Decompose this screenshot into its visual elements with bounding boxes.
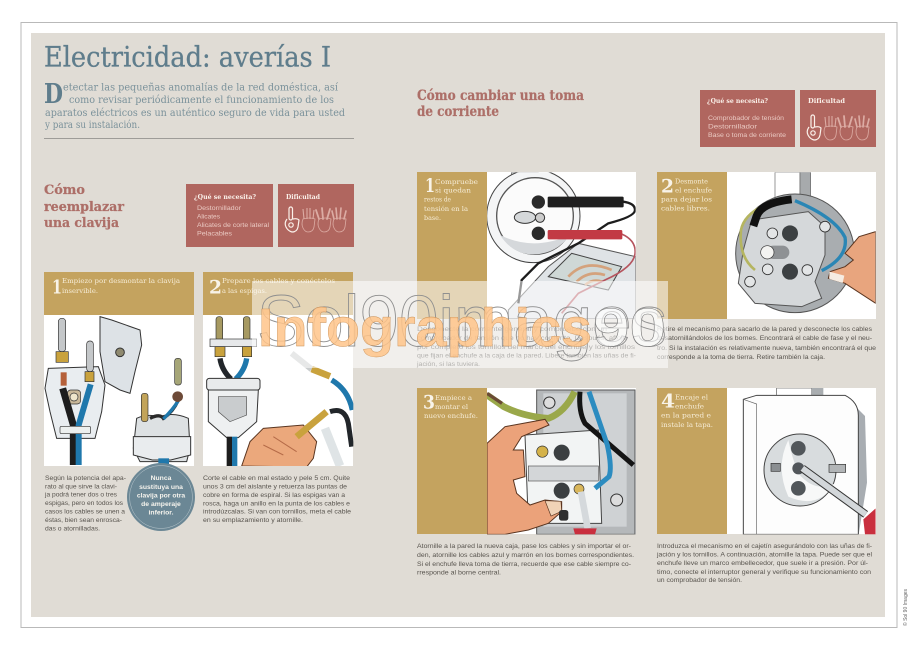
step 3 toma: gold panel: 3 bbox=[423, 392, 435, 414]
step 2 toma: text bbox=[657, 326, 876, 361]
intro paragraph: y para su instalación. bbox=[44, 119, 140, 131]
step 1 toma: gold panel: tensión en la bbox=[424, 205, 468, 213]
intro paragraph: como revisar periódicamente el funcionamiento de los bbox=[69, 94, 334, 106]
callout: nunca sustituya: Nunca bbox=[151, 475, 172, 482]
illustration: enchufe desmontado bbox=[727, 172, 876, 319]
heading: cómo reemplazar una clavija bbox=[44, 183, 124, 231]
step 1 clavija: text: éstas, bien sean enrosca- bbox=[45, 517, 122, 524]
step 2 toma: gold panel: el enchufe bbox=[675, 186, 712, 194]
step 4 toma: text bbox=[656, 543, 872, 584]
step 1 toma: text: por completo los tornillos del marco del enchufe y los tornillos bbox=[417, 344, 635, 351]
step 2 clavija: text: Corte el cable en mal estado y pele 5 cm. Quite bbox=[203, 475, 350, 482]
step 1 clavija: text: casos los cables se unen a bbox=[45, 509, 125, 516]
heading: cómo cambiar una toma de corriente bbox=[417, 88, 584, 120]
heading: cómo reemplazar una clavija: una clavija bbox=[44, 216, 120, 231]
step 1 toma: text: comprobador de tensión que no hay corriente. Después, afloje bbox=[417, 335, 628, 342]
watermark: Infographics bbox=[258, 298, 592, 358]
step 1 toma: text bbox=[416, 326, 636, 368]
intro paragraph: aparatos eléctricos es un auténtico seguro de vida para usted bbox=[45, 107, 345, 119]
panel: qué se necesita (clavija): ¿Qué se necesita? bbox=[194, 194, 256, 201]
panel: qué se necesita (clavija): Alicates bbox=[197, 214, 221, 220]
intro paragraph: etectar las pequeñas anomalías de la red doméstica, así bbox=[63, 82, 339, 94]
step 4 toma: text: timo, conecte el interruptor general y verifique su funcionamiento con bbox=[657, 569, 871, 576]
step 1 toma: gold panel: base. bbox=[424, 214, 441, 222]
step 3 toma: text: Atornille a la pared la nueva caja, pase los cables y sin importar el or- bbox=[417, 543, 631, 550]
panel: qué se necesita (toma): Comprobador de tensión bbox=[708, 115, 784, 122]
step 1 clavija: text: rato al que sirve la clavi- bbox=[45, 484, 117, 490]
step 1 clavija: text bbox=[44, 475, 126, 532]
step 3 toma: gold panel: nuevo enchufe. bbox=[424, 412, 478, 420]
step 2 clavija: header: Prepare los cables y conéctelos bbox=[222, 277, 335, 285]
step 1 toma: text: jación, si las tuviera. bbox=[416, 361, 480, 368]
step 1 clavija: header: Empiezo por desmontar la clavija bbox=[62, 277, 180, 285]
credit: © Sol 90 Images bbox=[902, 589, 909, 626]
step 3 toma: text: Si el enchufe lleva toma de tierra, recuerde que ese cable siempre co- bbox=[417, 561, 631, 568]
step 1 toma: text: Desconecte la corriente general y compruebe con un bbox=[417, 326, 608, 333]
callout: nunca sustituya: clavija por otra bbox=[137, 492, 185, 500]
step 4 toma: gold panel: Encaje el bbox=[675, 394, 708, 402]
step 2 clavija: text: rosca, haga un anillo en la punta de los cables e bbox=[203, 500, 350, 507]
step 4 toma: text: un comprobador de tensión. bbox=[657, 577, 742, 584]
step 1 clavija: header bbox=[44, 272, 194, 315]
callout: nunca sustituya: sustituya una bbox=[139, 484, 183, 491]
step 2 clavija: text: cobre en forma de espiral. Si las espigas van a bbox=[203, 492, 345, 499]
step 2 toma: gold panel: para dejar los bbox=[661, 196, 712, 204]
intro paragraph bbox=[44, 79, 345, 131]
step 1 toma: gold panel: 1 bbox=[425, 175, 435, 197]
step 2 toma: gold panel bbox=[657, 172, 727, 319]
step 2 toma: gold panel: Desmonte bbox=[675, 178, 708, 186]
step 3 toma: text: den, atornille los cables azul y marrón en los bornes correspondientes. bbox=[417, 552, 634, 559]
step 1 clavija: header: inservible. bbox=[62, 287, 98, 295]
step 2 clavija: header: 2 bbox=[209, 276, 222, 298]
step 1 toma: gold panel bbox=[417, 172, 487, 319]
heading: cómo cambiar una toma de corriente: de corriente bbox=[417, 104, 499, 120]
panel: qué se necesita (toma): Destornillador bbox=[708, 124, 758, 130]
panel: qué se necesita (clavija): Destornillador bbox=[197, 205, 242, 212]
illustration: clavija desmontada bbox=[44, 315, 194, 467]
illustration: comprobador de tensión bbox=[487, 169, 636, 319]
callout: nunca sustituya: de amperaje bbox=[141, 501, 181, 508]
step 1 toma: text: que fijan el enchufe a la caja de la pared. Libere también las uñas de fi- bbox=[417, 352, 636, 360]
step 3 toma: gold panel: Empiece a bbox=[435, 394, 472, 402]
step 2 clavija: header bbox=[203, 272, 353, 315]
step 2 toma: text: corresponde a la toma de tierra. Retire también la caja. bbox=[657, 354, 825, 361]
panel: qué se necesita (toma): Base o toma de corriente bbox=[708, 132, 786, 139]
step 1 clavija: text: ja podrá tener dos o tres bbox=[44, 492, 117, 499]
heading: cómo reemplazar una clavija: reemplazar bbox=[44, 200, 124, 215]
callout: nunca sustituya: inferior. bbox=[149, 510, 174, 516]
step 1 toma: gold panel: si quedan bbox=[435, 186, 471, 194]
step 1 toma: gold panel: restos de bbox=[424, 196, 451, 204]
step 2 clavija: text: unos 3 cm del aislante y retuerza las puntas de bbox=[203, 484, 347, 490]
step 3 toma: gold panel bbox=[417, 388, 487, 534]
step 4 toma: text: enchufe lleve un marco embellecedor, que suele ir a presión. Por úl- bbox=[657, 560, 868, 567]
callout: nunca sustituya bbox=[127, 463, 195, 531]
step 4 toma: gold panel: instale la tapa. bbox=[661, 421, 713, 429]
heading: cómo reemplazar una clavija: Cómo bbox=[44, 183, 85, 198]
step 2 toma: text: desatornillándolos de los bornes. Encontrará el cable de fase y el neu- bbox=[657, 335, 872, 342]
panel: qué se necesita (clavija) bbox=[186, 184, 273, 247]
panel: qué se necesita (toma) bbox=[700, 90, 795, 147]
step 4 toma: gold panel: en la pared e bbox=[661, 412, 711, 420]
panel: dificultad (toma) bbox=[800, 90, 876, 147]
title: Electricidad: averías I bbox=[44, 40, 331, 74]
step 1 clavija: text: espigas, pero en todos los bbox=[45, 500, 123, 507]
step 3 toma: text bbox=[417, 543, 634, 576]
step 1 clavija: text: das o atornilladas. bbox=[45, 526, 100, 532]
panel: dificultad (clavija) bbox=[278, 184, 354, 247]
heading: cómo cambiar una toma de corriente: Cómo cambiar una toma bbox=[417, 88, 584, 104]
panel: dificultad (toma): Dificultad bbox=[808, 98, 846, 105]
step 1 clavija: text: Según la potencia del apa- bbox=[45, 475, 126, 482]
step 2 toma: text: tro. Si la instalación es relativamente nueva, también encontrará el que bbox=[657, 345, 876, 352]
step 1 toma: gold panel: Compruebe bbox=[435, 178, 478, 186]
watermark: Sol90images bbox=[257, 282, 667, 362]
step 3 toma: text: rresponde al borne central. bbox=[417, 570, 501, 576]
step 2 clavija: text: introdúzcalas. Si van con tornillos, meta el cable bbox=[203, 509, 351, 516]
step 4 toma: gold panel: enchufe bbox=[675, 402, 704, 410]
step 4 toma: gold panel: 4 bbox=[661, 390, 675, 412]
step 2 toma: gold panel: 2 bbox=[661, 176, 674, 198]
illustration: montaje del nuevo enchufe bbox=[487, 388, 636, 534]
panel: qué se necesita (clavija): Alicates de corte lateral bbox=[197, 222, 270, 229]
panel: qué se necesita (toma): ¿Qué se necesita? bbox=[707, 98, 768, 105]
step 3 toma: gold panel: montar el bbox=[435, 403, 468, 411]
illustration: preparar cables bbox=[203, 315, 353, 467]
step 2 clavija: header: a las espigas. bbox=[222, 287, 267, 295]
panel: qué se necesita (clavija): Pelacables bbox=[197, 230, 233, 238]
step 4 toma: text: Introduzca el mecanismo en el cajetín asegurándolo con las uñas de fi- bbox=[657, 543, 872, 550]
step 2 clavija: text bbox=[203, 475, 351, 524]
panel: dificultad (clavija): Dificultad bbox=[286, 194, 321, 201]
step 2 toma: text: Retire el mecanismo para sacarlo de la pared y desconecte los cables bbox=[657, 326, 872, 333]
step 2 clavija: text: en su emplazamiento y atornille. bbox=[203, 517, 303, 524]
watermark: 90 bbox=[593, 298, 666, 358]
illustration: enchufe instalado bbox=[727, 388, 876, 534]
intro paragraph: D bbox=[44, 79, 63, 110]
step 4 toma: gold panel bbox=[657, 388, 727, 534]
step 4 toma: text: jación y los tornillos. A continuación, atornille la tapa. Puede ser que el bbox=[656, 552, 872, 558]
step 1 clavija: header: 1 bbox=[52, 276, 62, 298]
step 2 toma: gold panel: cables libres. bbox=[661, 204, 710, 212]
